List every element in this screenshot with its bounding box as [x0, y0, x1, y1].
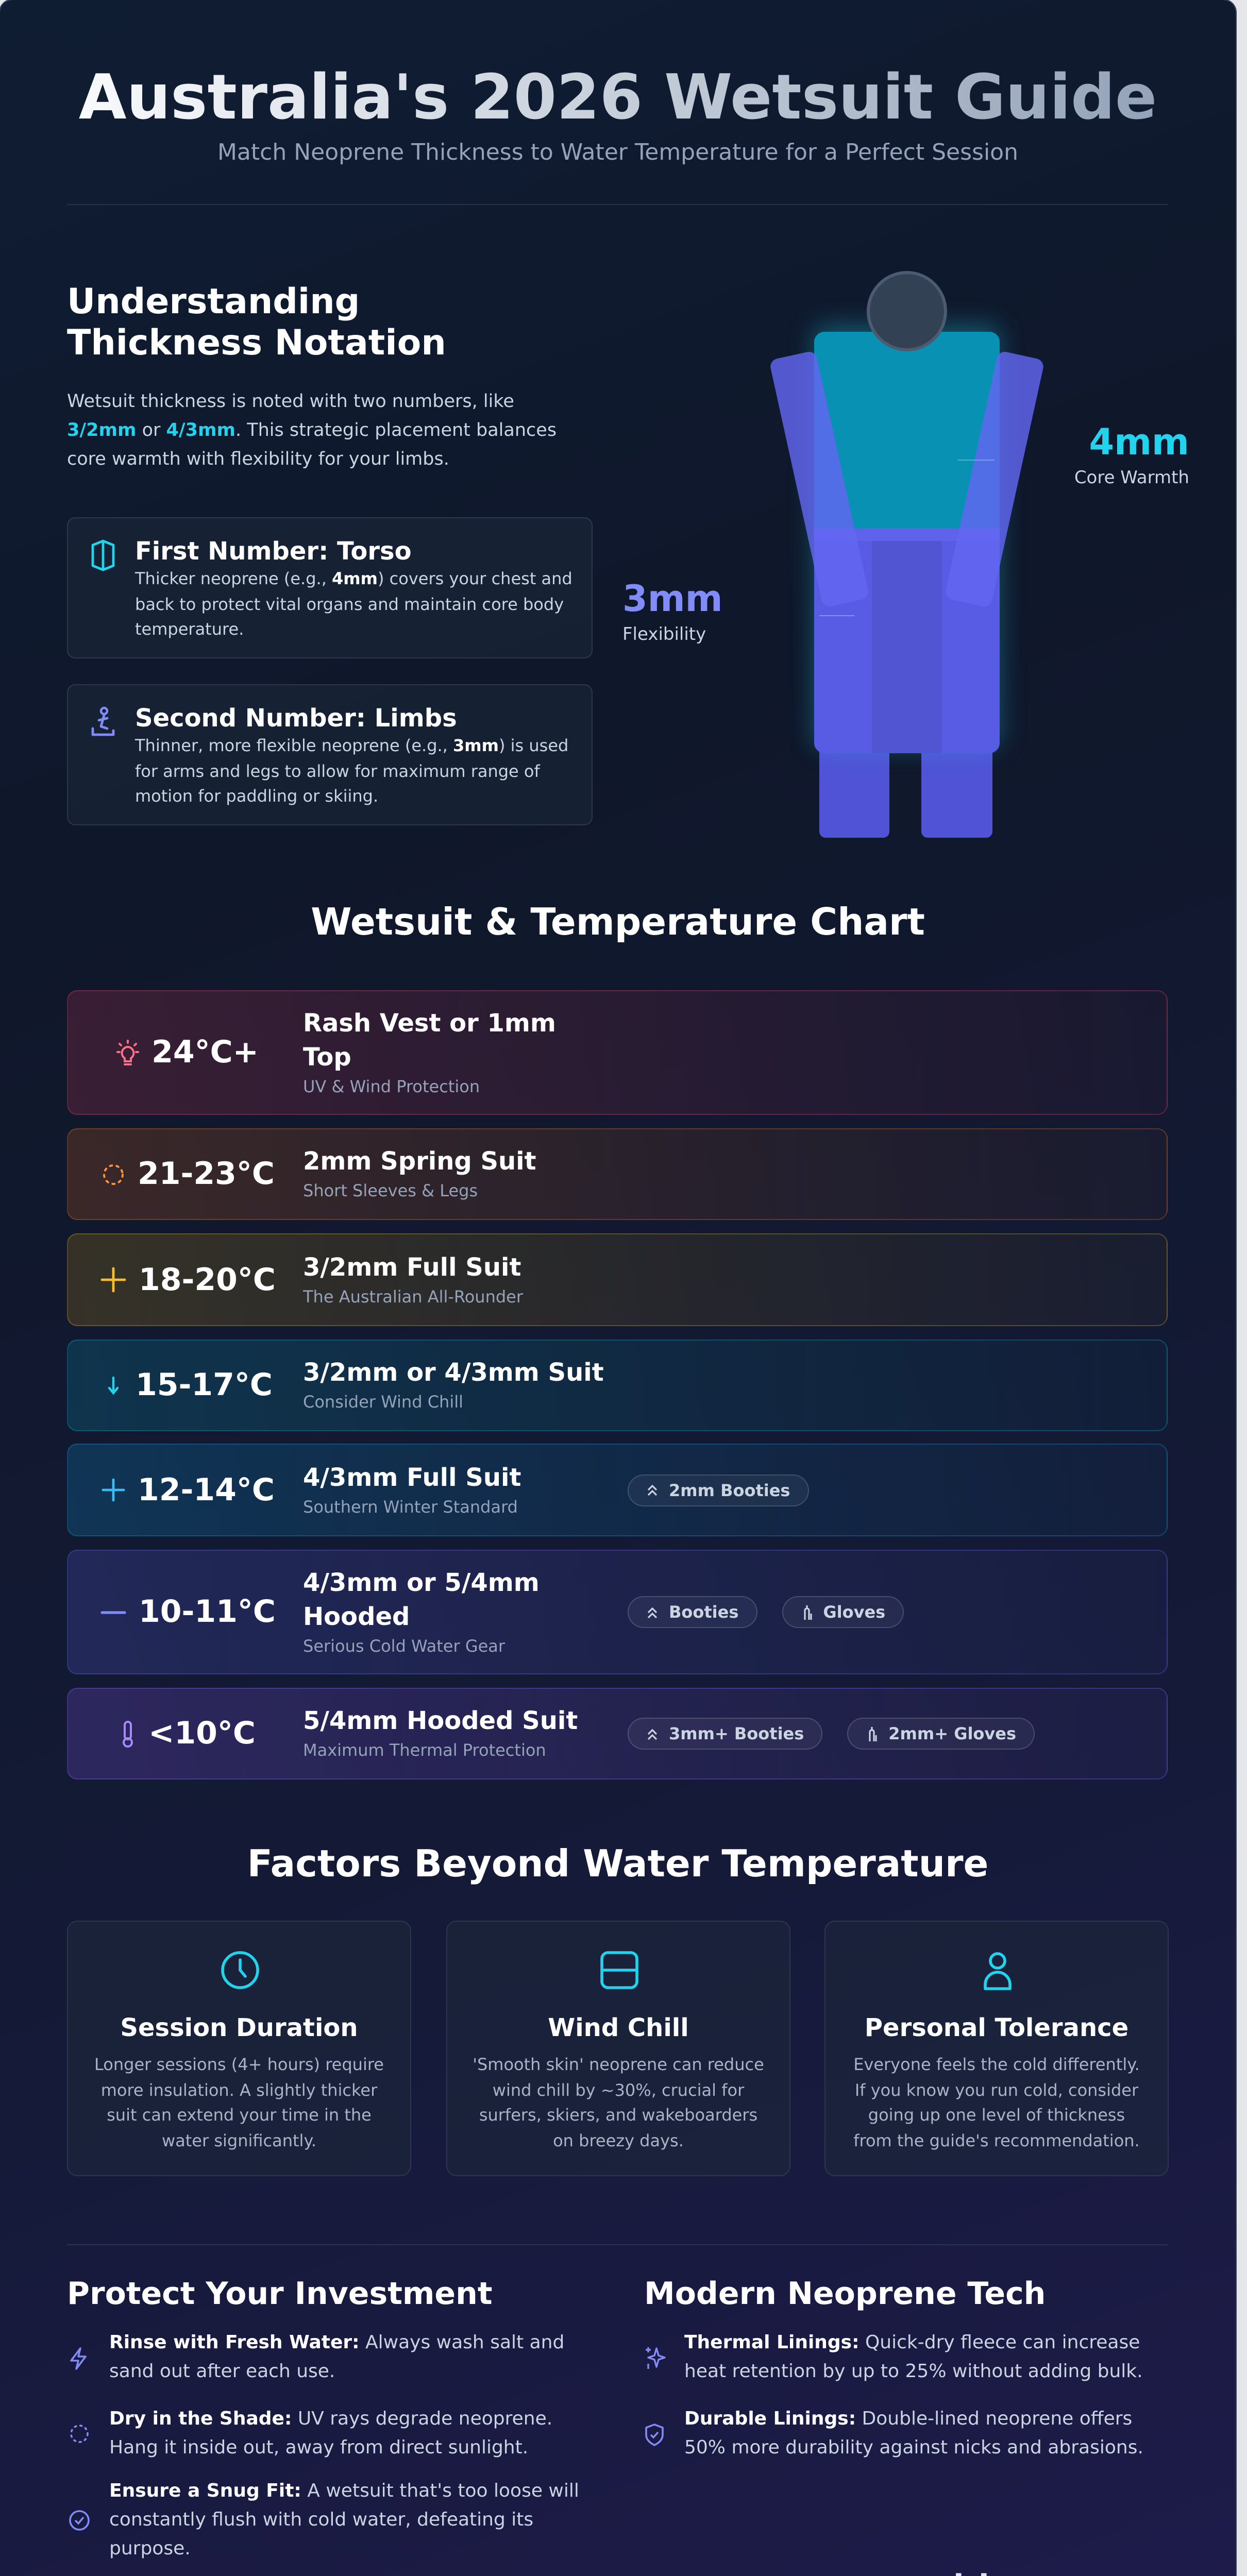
- label: 4mm core warmth: [1074, 422, 1189, 488]
- row: 18-20C: The Australian All-Rounder: [303, 1286, 523, 1306]
- intro paragraph: [67, 392, 557, 469]
- card text: motion for paddling or skiing.: [135, 786, 378, 806]
- row: 18-20C: 3/2mm Full Suit: [303, 1252, 521, 1281]
- list item: durable linings: 50% more durability against nicks and abrasions.: [684, 2437, 1143, 2459]
- row: 10-11C: 4/3mm or 5/4mm: [303, 1568, 540, 1597]
- badges: 2mm+ Gloves: [888, 1724, 1016, 1743]
- panel: second number limbs: [67, 684, 593, 825]
- label: 3mm flexibility: [622, 579, 723, 645]
- panel: first number torso: [67, 517, 593, 658]
- panel: session duration: [67, 1921, 411, 2176]
- title: Australia's 2026 Wetsuit Guide: [79, 62, 1157, 134]
- card text: temperature.: [135, 619, 244, 639]
- badges: Booties: [669, 1602, 738, 1622]
- row: 18-20C: 18-20°C: [139, 1262, 276, 1298]
- row: 21-23C: [67, 1128, 1168, 1220]
- card text: back to protect vital organs and maintain core body: [135, 594, 564, 614]
- card title: First Number: Torso: [135, 537, 412, 566]
- row: 15-17C: Consider Wind Chill: [303, 1392, 463, 1412]
- heading: factors: Factors Beyond Water Temperature: [247, 1843, 988, 1886]
- panel: personal tolerance: Everyone feels the cold differently.: [853, 2055, 1140, 2074]
- list item: dry in shade: Dry in the Shade: UV rays degrade neoprene.: [109, 2408, 552, 2430]
- card text: Thicker neoprene (e.g., 4mm) covers your chest and: [135, 569, 572, 588]
- arms: [769, 350, 870, 608]
- heading: protect your investment: Protect Your Investment: [67, 2276, 493, 2312]
- row: 21-23C: Short Sleeves & Legs: [303, 1181, 478, 1200]
- list item: snug fit: Ensure a Snug Fit: A wetsuit that's too loose will: [109, 2480, 579, 2502]
- torso: [814, 332, 1000, 753]
- row: 10-11C: Serious Cold Water Gear: [303, 1636, 505, 1655]
- card text: [135, 736, 568, 806]
- label: 3mm flexibility: Flexibility: [622, 624, 706, 645]
- row: 15-17C: 3/2mm or 4/3mm Suit: [303, 1358, 604, 1387]
- row: 10-11C: [67, 1550, 1168, 1674]
- panel: session duration: more insulation. A slightly thicker: [101, 2080, 377, 2099]
- row: 10-11C: 10-11°C: [139, 1594, 276, 1630]
- panel: personal tolerance: going up one level of thickness: [868, 2105, 1125, 2125]
- list item: thermal linings: Thermal Linings: Quick-dry fleece can increase: [684, 2332, 1140, 2353]
- badges: Gloves: [823, 1602, 885, 1622]
- panel: wind chill: Wind Chill: [548, 2013, 689, 2042]
- icon: layers: [600, 1951, 638, 1989]
- list item: rinse: sand out after each use.: [109, 2361, 335, 2382]
- intro paragraph: core warmth with flexibility for your limbs.: [67, 449, 449, 469]
- card text: [135, 569, 572, 639]
- heading: understanding thickness notation: Thickness Notation: [67, 323, 446, 364]
- list item: durable linings: [684, 2405, 1143, 2463]
- row: 24C+: [67, 990, 1168, 1115]
- panel: session duration: Longer sessions (4+ hours) require: [94, 2055, 384, 2074]
- card text: for arms and legs to allow for maximum range of: [135, 761, 540, 781]
- panel: session duration: water significantly.: [162, 2130, 316, 2150]
- panel: personal tolerance: from the guide's recommendation.: [853, 2130, 1140, 2150]
- list item: rinse: [70, 2332, 564, 2382]
- wetsuit figure diagram: [770, 271, 1043, 838]
- list item: snug fit: constantly flush with cold water, defeating its: [109, 2509, 533, 2531]
- heading: modern neoprene tech: Modern Neoprene Tech: [644, 2276, 1046, 2312]
- heading: chart: Wetsuit & Temperature Chart: [311, 902, 925, 944]
- list item: thermal linings: heat retention by up to 25% without adding bulk.: [684, 2361, 1143, 2382]
- panel: personal tolerance: [824, 1921, 1169, 2176]
- intro paragraph: Wetsuit thickness is noted with two numbers, like: [67, 392, 514, 412]
- row: 24C+: Rash Vest or 1mm: [303, 1008, 556, 1037]
- panel: wind chill: [446, 1921, 790, 2176]
- legs: [819, 742, 889, 838]
- row: <10C: <10°C: [148, 1716, 256, 1752]
- row: <10C: Maximum Thermal Protection: [303, 1740, 546, 1760]
- row: 12-14C: 12-14°C: [138, 1472, 275, 1508]
- list item: dry in shade: Hang it inside out, away from direct sunlight.: [109, 2437, 528, 2459]
- row: 18-20C: [67, 1233, 1168, 1326]
- card text: Thinner, more flexible neoprene (e.g., 3mm) is used: [135, 736, 568, 755]
- row: 15-17C: [67, 1340, 1168, 1431]
- badge: booties: 2mm Booties: [669, 1480, 790, 1500]
- row: 10-11C: Hooded: [303, 1602, 410, 1631]
- panel: personal tolerance: If you know you run cold, consider: [855, 2080, 1138, 2099]
- panel: wind chill: 'Smooth skin' neoprene can reduce: [473, 2055, 764, 2074]
- icon: person: [984, 1952, 1012, 1990]
- panel: wind chill: wind chill by ~30%, crucial for: [493, 2080, 744, 2099]
- row: 24C+: UV & Wind Protection: [303, 1076, 480, 1096]
- list item: thermal linings: [684, 2329, 1143, 2386]
- badge: booties: [628, 1474, 808, 1506]
- list item: rinse: Rinse with Fresh Water: Always wash salt and: [109, 2332, 564, 2353]
- row: 12-14C: [67, 1444, 1168, 1536]
- row: 21-23C: 21-23°C: [138, 1156, 275, 1192]
- subtitle: Match Neoprene Thickness to Water Temperature for a Perfect Session: [217, 140, 1018, 166]
- panel: wind chill: surfers, skiers, and wakeboarders: [479, 2105, 757, 2125]
- icon: limbs: [92, 707, 114, 736]
- heading: understanding thickness notation: Understanding: [67, 281, 360, 323]
- icon: clock: [221, 1951, 259, 1989]
- row: 12-14C: 4/3mm Full Suit: [303, 1463, 521, 1492]
- badges: 3mm+ Booties: [669, 1724, 804, 1743]
- list item: snug fit: [69, 2480, 579, 2560]
- icon: torso: [92, 540, 114, 571]
- heading: understanding thickness notation: [67, 281, 446, 364]
- badges: [628, 1718, 1035, 1750]
- label: 4mm core warmth: 4mm: [1089, 422, 1189, 464]
- row: 15-17C: 15-17°C: [136, 1367, 273, 1403]
- row: <10C: 5/4mm Hooded Suit: [303, 1706, 578, 1735]
- label: 3mm flexibility: 3mm: [622, 579, 723, 620]
- row: <10C: [67, 1688, 1168, 1780]
- list item: dry in shade: [70, 2408, 552, 2459]
- card title: Second Number: Limbs: [135, 704, 457, 733]
- badges: [628, 1596, 904, 1628]
- row: 12-14C: Southern Winter Standard: [303, 1497, 518, 1516]
- intro paragraph: 3/2mm or 4/3mm. This strategic placement balances: [67, 420, 557, 441]
- row: 24C+: 24°C+: [151, 1035, 259, 1071]
- list item: snug fit: purpose.: [109, 2538, 191, 2560]
- list item: durable linings: Durable Linings: Double-lined neoprene offers: [684, 2408, 1132, 2430]
- panel: session duration: Session Duration: [120, 2013, 358, 2042]
- label: 4mm core warmth: Core Warmth: [1074, 468, 1189, 488]
- row: 21-23C: 2mm Spring Suit: [303, 1147, 536, 1176]
- row: 24C+: Top: [303, 1042, 351, 1071]
- panel: personal tolerance: Personal Tolerance: [865, 2013, 1128, 2042]
- panel: wind chill: on breezy days.: [553, 2130, 684, 2150]
- panel: session duration: suit can extend your time in the: [107, 2105, 372, 2125]
- head: [867, 271, 947, 351]
